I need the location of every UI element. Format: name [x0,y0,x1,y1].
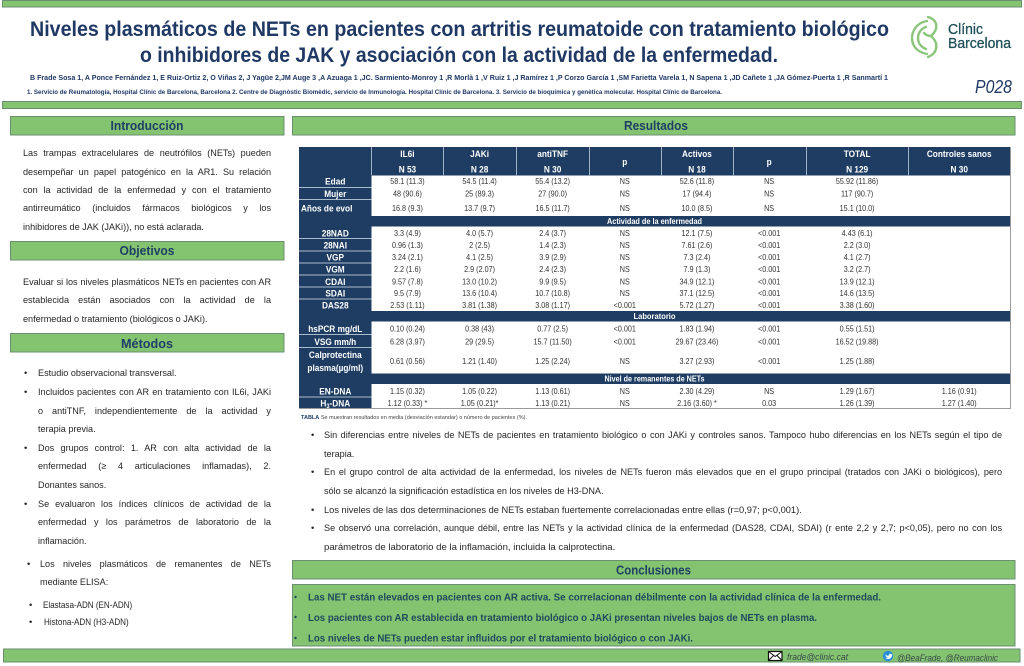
table values: <0.001 [758,357,780,366]
table values: NS [620,253,630,262]
método: histona: • [29,616,32,627]
table values: 7.3 (2.4) [684,253,711,262]
table header row: TOTAL [844,149,871,159]
table values: 16.5 (11.7) [535,204,570,213]
top banner bar [2,0,1022,7]
table values: <0.001 [758,265,780,274]
table values: 1.25 (1.88) [840,357,875,366]
table values: NS [620,204,630,213]
table values: 1.26 (1.39) [840,399,875,408]
table values: 1.05 (0.22) [462,387,497,396]
table values: 1.25 (2.24) [535,357,570,366]
table values: <0.001 [614,337,636,347]
table row labels: Años de evol [301,203,352,214]
método: grupos control: Dos grupos control: 1. AR con alta actividad de la [38,442,271,453]
método: grupos control: enfermedad (≥ 4 articulaciones inflamadas), 2. [38,460,271,471]
section band: Nivel de remanentes de NETs: Nivel de remanentes de NETs [604,375,705,384]
table values: 3.24 (2.1) [392,253,423,262]
table values: 2.16 (3.60) * [677,399,717,408]
icon: twitter [883,651,893,661]
table values: 12.1 (7.5) [682,229,713,238]
table values: <0.001 [758,301,780,310]
twitter handles: @BeaFrade, @Reumaclinic [897,653,998,663]
método: pacientes incluidos: • [24,386,27,397]
finding 1: terapia. [324,448,354,459]
table values: NS [764,189,774,199]
table row labels: -DNA [330,398,351,409]
table row labels [299,175,372,410]
table values: 7.61 (2.6) [682,241,713,250]
método: ELISA: Los niveles plasmáticos de remanentes de NETs [40,558,271,569]
heading: Introducción [10,116,284,135]
contact email: frade@clinic.cat [787,652,848,662]
table values: 25 (89.3) [465,189,494,199]
table values: 34.9 (12.1) [680,277,715,287]
table values: <0.001 [758,241,780,250]
table values: 13.7 (9.7) [464,204,495,213]
método: ELISA [27,558,271,587]
table header row: N 18 [688,164,706,175]
table values: <0.001 [614,324,636,334]
table values [388,177,977,408]
table values: 1.29 (1.67) [840,387,875,396]
table values: 1.13 (0.61) [535,387,570,396]
section band: Laboratorio: Laboratorio [634,312,676,321]
finding 1: Sin diferencias entre niveles de NETs de pacientes en tratamiento biológico o con JAKi y controles sanos. Tampoco hubo diferencias en los NETs según el tipo de [324,429,1002,440]
table values: 1.4 (2.3) [539,241,566,250]
table row labels: CDAI [325,277,345,287]
método: pacientes incluidos: o antiTNF, independientemente de la actividad y [38,405,271,416]
table values: 13.9 (12.1) [840,277,875,287]
logo: Clínic Barcelona: Barcelona [948,35,1012,52]
table values: 2.4 (3.7) [539,229,566,238]
text block: introducción: desempeñar un papel patogénico en la AR1. Su relación [23,166,271,177]
table values: <0.001 [614,301,636,310]
heading: Objetivos: Objetivos [120,243,174,258]
heading: Métodos [10,334,284,352]
table values: 9.9 (9.5) [539,277,566,287]
table header row: N 53 [399,164,416,175]
table values: 2 (2.5) [469,241,490,250]
finding 1: • [311,429,314,440]
table values: 3.38 (1.60) [840,301,875,310]
table values: 15.1 (10.0) [840,204,875,213]
table values: 9.57 (7.8) [392,277,423,287]
table row labels: Calprotectina [309,350,362,360]
table values: 2.9 (2.07) [464,265,495,274]
table values: <0.001 [758,253,780,262]
text block: introducción: con la actividad de la enfermedad y con el tratamiento [23,184,271,195]
método: grupos control: • [24,442,27,453]
método: ELISA: • [27,558,30,569]
table values: 6.28 (3.97) [390,337,425,347]
table values: <0.001 [758,337,780,347]
table values: NS [764,177,774,186]
table row labels: DAS28 [322,300,349,311]
text block: introducción: antirreumático (incluidos fármacos biológicos y los [23,202,271,213]
table row labels: VGM [326,264,345,275]
table values: 2.53 (1.11) [390,301,425,310]
table values: 1.15 (0.32) [390,387,425,396]
table header row: N 28 [471,164,488,175]
finding 4 [311,522,1002,552]
table values: 3.27 (2.93) [680,357,715,366]
table row labels: 28NAD [322,228,349,239]
método: índices clínicos: Se evaluaron los índices clínicos de actividad de la [38,498,271,509]
table header row: IL6i [400,149,415,159]
heading: Resultados [292,116,1015,135]
conclusion 3: Los niveles de NETs pueden estar influidos por el tratamiento biológico o con JAKi. [308,634,693,644]
table values: NS [620,241,630,250]
método: índices clínicos: • [24,498,27,509]
table values: NS [620,277,630,287]
table values: 1.05 (0.21)* [461,399,498,408]
table values: <0.001 [758,229,780,238]
table header row [299,147,1010,176]
table row labels: 28NAI [324,240,347,251]
table values: 27 (90.0) [538,189,567,199]
table row labels: hsPCR mg/dL [308,324,363,334]
table values: 52.6 (11.8) [680,177,715,186]
table values: 13.0 (10.2) [462,277,497,287]
table row labels: SDAI [325,288,345,299]
table header row: N 30 [950,164,968,175]
table values: 3.81 (1.38) [462,301,497,310]
table row labels: 3 [326,403,330,410]
heading: Conclusiones: Conclusiones [616,562,691,578]
finding 3: Los niveles de las dos determinaciones de NETs estaban fuertemente correlacionadas entre ellas (r=0,97; p<0,001). [324,504,802,515]
icon: envelope [768,652,782,660]
table row labels: H [320,398,326,409]
heading: Resultados: Resultados [624,118,688,133]
table row labels: plasma(µg/ml) [307,363,363,373]
método: ELISA: mediante ELISA: [40,576,108,587]
results table [299,147,1010,410]
método: pacientes incluidos: terapia previa. [38,423,96,434]
table row labels: VGP [327,252,344,263]
table values: 0.61 (0.56) [390,357,425,366]
table values: 10.0 (8.5) [682,204,713,213]
table values: 0.96 (1.3) [392,241,423,250]
table values: 1.16 (0.91) [942,387,977,396]
método: grupos control [24,442,271,490]
table values: 2.2 (3.0) [844,241,871,250]
table values: 0.77 (2.5) [537,324,568,334]
table values: 9.5 (7.9) [394,289,421,298]
table values: NS [620,189,630,199]
text block: introducción [23,147,271,232]
table values: 29 (29.5) [465,337,494,347]
método: estudio: Estudio observacional transversal. [38,367,176,378]
table values: NS [764,204,774,213]
finding 4: Se observó una correlación, aunque débil, entre las NETs y la actividad clínica de la enfermedad (DAS28, CDAI, SDAI) (r ente 2,2 y 2,7; p<0,05), pero no con los [324,522,1002,533]
heading: Conclusiones [292,560,1015,579]
table header row: p [767,157,772,167]
table row labels: VSG mm/h [314,337,356,347]
text block: introducción: inhibidores de JAK (JAKi)), no está aclarada. [23,221,204,232]
table values: 4.43 (6.1) [842,229,873,238]
método: estudio: • [24,367,27,378]
section band: Actividad de la enfermedad: Actividad de la enfermedad [607,217,702,226]
table header row: N 30 [544,164,561,175]
table values: NS [620,229,630,238]
método: histona: Histona-ADN (H3-ADN) [44,616,129,627]
logo: Clínic Barcelona [912,17,1012,57]
table values: 3.9 (2.9) [539,253,566,262]
table values: 58.1 (11.3) [390,177,425,186]
table values: 16.8 (9.3) [392,204,423,213]
table values: 2.4 (2.3) [539,265,566,274]
heading: Objetivos [10,242,284,260]
title: o inhibidores de JAK y asociación con la actividad de la enfermedad. [140,43,778,67]
método: elastasa: Elastasa-ADN (EN-ADN) [43,599,132,610]
text block: objetivos [23,276,272,324]
table values: NS [620,399,630,408]
table header row: JAKi [470,149,489,159]
table values: 5.72 (1.27) [680,301,715,310]
panel: conclusions [292,584,1015,646]
table values: <0.001 [758,324,780,334]
table values: NS [620,177,630,186]
table footnote: TABLA Se muestran resultados en media (desviación estandar) o número de pacientes (%). [301,415,527,421]
table values: 4.1 (2.5) [466,253,493,262]
finding 4: parámetros de laboratorio de la inflamación, incluida la calprotectina. [324,541,615,552]
table values: 10.7 (10.8) [535,289,570,298]
title [30,17,889,67]
table header row: p [622,157,628,167]
table values: NS [620,387,630,396]
table values: 15.7 (11.50) [533,337,572,347]
finding 2: En el grupo control de alta actividad de la enfermedad, los niveles de NETs fueron más elevados que en el grupo principal (tratados con JAKi o biológicos), pero [324,466,1002,477]
table values: 2.2 (1.6) [394,265,421,274]
table values: 48 (90.6) [393,189,422,199]
heading: Métodos: Métodos [121,336,173,351]
finding 4: • [311,522,314,533]
table values: 13.6 (10.4) [462,289,497,298]
text block: introducción: Las trampas extracelulares de neutrófilos (NETs) pueden [23,147,271,158]
table values: NS [620,357,630,366]
table values: 16.52 (19.88) [836,337,879,347]
table values: <0.001 [758,289,780,298]
table values: NS [620,265,630,274]
finding 2: • [311,466,314,477]
table values: NS [764,387,774,396]
section band: Actividad de la enfermedad [299,216,1010,226]
table values: 0.03 [762,399,776,408]
bottom banner bar [4,649,1020,662]
text block: objetivos: enfermedad o tratamiento (biológicos o JAKi). [23,313,207,324]
table values: 1.13 (0.21) [535,399,570,408]
table values: 0.10 (0.24) [390,324,425,334]
método: grupos control: Donantes sanos. [38,479,106,490]
text block: results findings [311,429,1002,552]
table values: 1.83 (1.94) [680,324,715,334]
table values: 17 (94.4) [683,189,712,199]
table values: 4.0 (5.7) [466,229,493,238]
table values: NS [620,289,630,298]
método: pacientes incluidos [24,386,271,434]
table values: 7.9 (1.3) [684,265,711,274]
table values: 0.38 (43) [465,324,494,334]
title: Niveles plasmáticos de NETs en pacientes con artritis reumatoide con tratamiento biológico [30,17,889,41]
heading: Introducción: Introducción [110,118,184,133]
table header row: N 129 [846,164,868,175]
table values: 2.30 (4.29) [680,387,715,396]
text block: objetivos: Evaluar si los niveles plasmáticos NETs en pacientes con AR [23,276,271,287]
table values: 54.5 (11.4) [462,177,497,186]
affiliations: 1. Servicio de Reumatología, Hospital Clínic de Barcelona, Barcelona 2. Centre de Diagnòstic Biomèdic, servicio de Inmunología. Hospital Clínic de Barcelona. 3. Servicio de bioquímica y genètica molecular. Hospital Clínic de Barcelona. [27,89,722,96]
table values: 55.4 (13.2) [535,177,570,186]
conclusion 2: Los pacientes con AR establecida en tratamiento biológico o JAKi presentan niveles bajos de NETs en plasma. [308,613,817,624]
table row labels: Mujer [324,189,347,199]
table values: 3.3 (4.9) [394,229,421,238]
section band: Laboratorio [299,311,1010,322]
método: pacientes incluidos: Incluidos pacientes con AR en tratamiento con IL6i, JAKi [38,386,271,397]
table values: 55.92 (11.86) [836,177,879,186]
logo: Clínic Barcelona: Clínic [948,21,983,38]
finding 1 [311,429,1002,459]
table values: 14.6 (13.5) [840,289,875,298]
section band: Nivel de remanentes de NETs [299,374,1010,384]
table header row: Activos [682,149,712,159]
table row labels: Edad [325,176,345,187]
table values: 1.12 (0.33) * [388,399,427,408]
text block: objetivos: establecida están asociados con la actividad de la [23,294,271,305]
table values: 1.27 (1.40) [942,399,977,408]
table values: 37.1 (12.5) [680,289,715,298]
table values: 3.08 (1.17) [535,301,570,310]
table values: 4.1 (2.7) [844,253,871,262]
authors: B Frade Sosa 1, A Ponce Fernández 1, E Ruiz-Ortiz 2, O Viñas 2, J Yagüe 2,JM Auge 3 ,A Azuaga 1 ,JC. Sarmiento-Monroy 1 ,R Morlà 1 ,V Ruiz 1 ,J Ramírez 1 ,P Corzo García 1 ,SM Farietta Varela 1, N Sapena 1 ,JD Cañete 1 ,JA Gómez-Puerta 1 ,R Sanmartí 1 [30,73,888,82]
finding 2 [311,466,1002,496]
finding 2: sólo se alcanzó la significación estadística en los niveles de H3-DNA. [324,485,604,496]
método: elastasa: • [29,599,32,610]
table values: 29.67 (23.46) [676,337,719,347]
conclusion 1: Las NET están elevados en pacientes con AR activa. Se correlacionan débilmente con la actividad clínica de la enfermedad. [308,592,881,604]
divider banner bar [2,102,1022,108]
poster code: P028 [975,77,1012,97]
método: índices clínicos: inflamación. [38,535,87,546]
table values: 3.2 (2.7) [844,265,871,274]
table row labels: EN-DNA [319,386,352,397]
método: índices clínicos [24,498,271,546]
table values: <0.001 [758,277,780,287]
table header row: Controles sanos [927,149,992,159]
text block: métodos list [24,367,271,627]
table header row: antiTNF [537,149,569,159]
table values: 0.55 (1.51) [840,324,875,334]
finding 3: • [311,504,314,515]
table values: 1.21 (1.40) [462,357,497,366]
método: índices clínicos: enfermedad y los parámetros de laboratorio de la [38,516,271,527]
table values: 117 (90.7) [841,189,874,199]
